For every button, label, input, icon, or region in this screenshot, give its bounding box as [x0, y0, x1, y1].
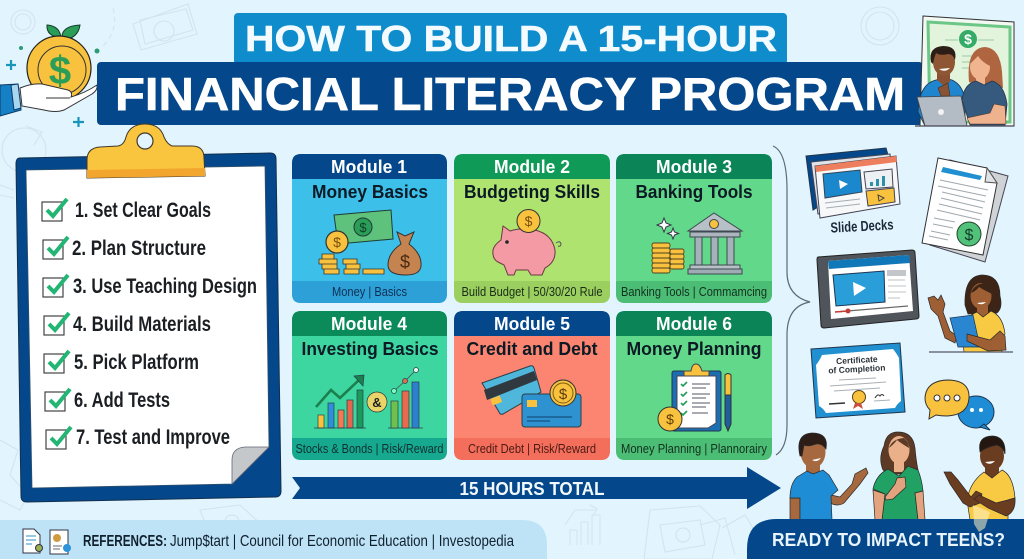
call to action: ready to impact teens [747, 505, 1024, 559]
checklist item 1 [42, 199, 211, 222]
illustration: teacher with tablet [928, 275, 1013, 352]
icon: cash, coins and money bag: $ [400, 252, 410, 272]
panel: module 4: Investing Basics [302, 338, 438, 359]
panel: module 1: Money | Basics [332, 284, 407, 299]
teen in green shirt [873, 432, 925, 520]
references bar [0, 520, 547, 559]
panel: module 6 [616, 311, 772, 460]
checklist item 7: 7. Test and Improve [76, 426, 230, 449]
laptop [917, 96, 967, 126]
teen in yellow shirt [944, 436, 1015, 520]
icon: cash, coins and money bag: $ [359, 220, 367, 235]
icon: hand holding coin with sprout [0, 25, 100, 127]
icon: bank and coin stacks [652, 213, 742, 274]
panel: module 2: Module 2 [494, 157, 570, 177]
panel: module 5: Credit and Debt [466, 338, 598, 359]
checklist item 5 [44, 351, 199, 374]
references text: Jump$tart | Council for Economic Education | Investopedia [170, 533, 514, 550]
panel: module 1: Module 1 [331, 157, 407, 177]
illustration: three teens talking [790, 432, 1015, 520]
panel: module 2: Build Budget | 50/30/20 Rule [462, 284, 602, 299]
title: top banner: HOW TO BUILD A 15-HOUR [245, 18, 777, 59]
panel: module 6: Money Planning [626, 338, 762, 359]
educator with long hair [962, 47, 1007, 125]
panel: clipboard checklist [16, 124, 281, 502]
arrow: 15 hours total: 15 HOURS TOTAL [460, 478, 604, 499]
icon: certificate of completion: of Completion [828, 363, 886, 375]
panel: module 3: Module 3 [656, 157, 732, 177]
icon: cash, coins and money bag [319, 210, 421, 275]
clipboard paper [26, 166, 269, 488]
icon: piggy bank with coin: $ [525, 213, 533, 229]
checklist item 3: 3. Use Teaching Design [73, 275, 257, 298]
icon: certificate of completion: Certificate [836, 354, 878, 366]
illustration: two educators with laptop [915, 16, 1014, 126]
educator in blue [918, 46, 965, 126]
icon: worksheet document [922, 158, 1008, 262]
checklist item 2: 2. Plan Structure [72, 237, 206, 260]
panel: module 3: Banking Tools | Commamcing [621, 284, 767, 299]
illustration: two educators with laptop: $ [964, 31, 972, 47]
checklist item 2 [43, 237, 206, 260]
panel: module 6: Module 6 [656, 314, 732, 334]
icon: planning clipboard, coin and pen [658, 364, 731, 431]
arrow: 15 hours total [292, 467, 781, 509]
icon: reference documents [23, 529, 71, 554]
icon: slide decks [806, 148, 900, 237]
icon: video lesson tablet [817, 250, 919, 328]
teen in blue shirt [790, 433, 868, 520]
icon: chat bubbles [925, 380, 994, 430]
checklist item 7 [46, 426, 230, 449]
checklist item 4 [44, 313, 211, 336]
panel: module 3: Banking Tools [636, 181, 752, 202]
icon: investing bar charts [314, 368, 423, 428]
panel: module 1: Money Basics [312, 181, 428, 202]
checklist item 1: 1. Set Clear Goals [75, 199, 211, 222]
panel: module 5: Credit Debt | Risk/Reward [468, 441, 596, 456]
references text: REFERENCES: [83, 533, 167, 550]
panel: module 2: Budgeting Skills [464, 181, 600, 202]
checklist item 4: 4. Build Materials [73, 313, 211, 336]
icon: credit cards and coin: $ [559, 386, 568, 403]
icon: cash, coins and money bag: $ [333, 234, 341, 250]
panel: module 4: Stocks & Bonds | Risk/Reward [296, 441, 444, 456]
icon: planning clipboard, coin and pen: $ [666, 411, 674, 427]
panel: module 4: Module 4 [331, 314, 407, 334]
clipboard clip [87, 124, 205, 178]
panel: module 1 [292, 154, 447, 303]
panel: module 3 [616, 154, 772, 303]
checklist item 3 [43, 275, 257, 298]
icon: hand holding coin with sprout: $ [49, 49, 71, 93]
checklist item 5: 5. Pick Platform [74, 351, 199, 374]
panel: module 5 [454, 311, 610, 460]
icon: piggy bank with coin [493, 210, 561, 275]
title: main banner: FINANCIAL LITERACY PROGRAM [115, 68, 905, 120]
call to action: ready to impact teens: READY TO IMPACT TEENS? [772, 529, 1005, 550]
title: top banner [234, 13, 787, 65]
brace connecting modules to materials [773, 146, 810, 455]
slide decks label: Slide Decks [830, 217, 894, 237]
icon: investing bar charts: & [372, 395, 382, 410]
icon: certificate of completion [811, 343, 905, 418]
panel: module 2 [454, 154, 610, 303]
icon: credit cards and coin [482, 366, 581, 427]
panel: module 6: Money Planning | Plannorairy [621, 441, 767, 456]
page curl [232, 447, 269, 484]
checklist item 6 [45, 389, 170, 412]
icon: worksheet document: $ [965, 227, 974, 244]
panel: module 5: Module 5 [494, 314, 570, 334]
clipboard board [16, 153, 281, 502]
checklist item 6: 6. Add Tests [74, 389, 170, 412]
panel: module 4 [292, 311, 447, 460]
